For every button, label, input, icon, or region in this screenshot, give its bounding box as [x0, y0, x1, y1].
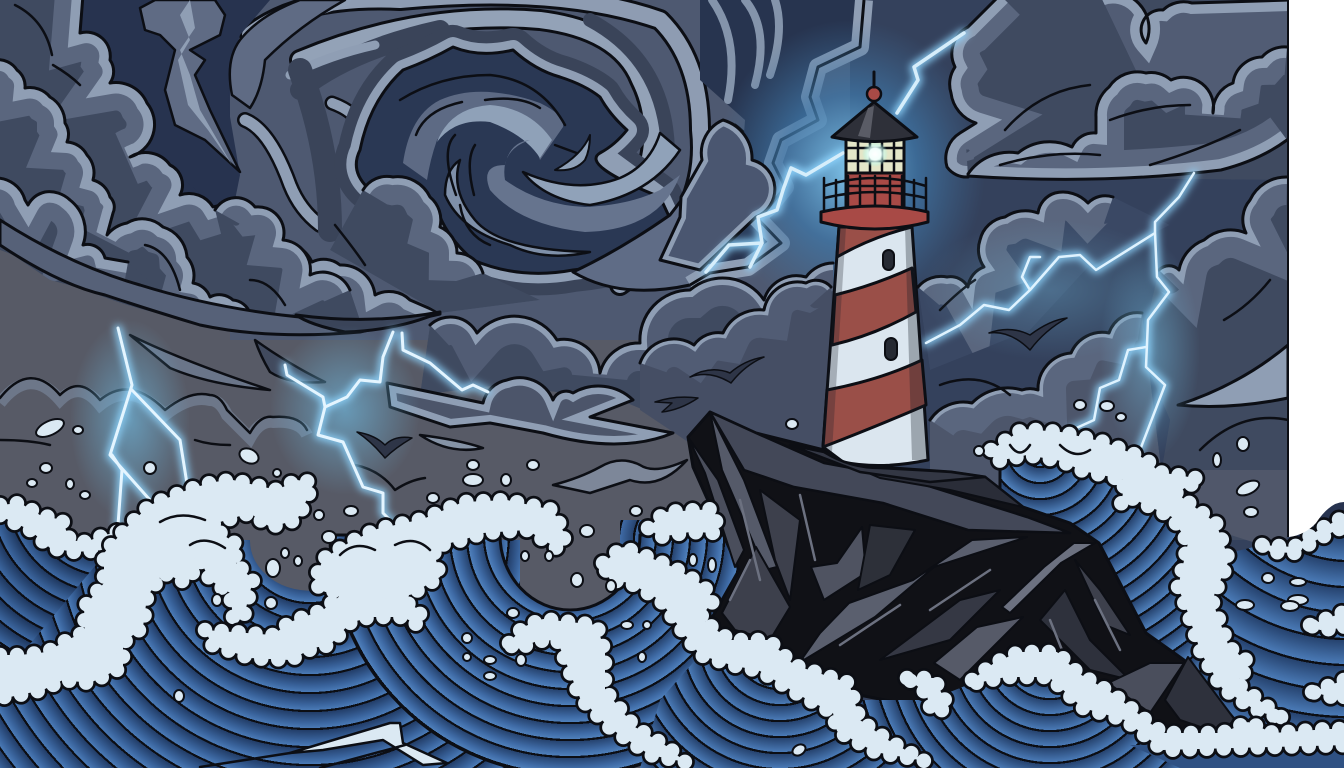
foam: right rim: [1262, 514, 1344, 553]
outline of front left: [0, 60, 320, 333]
rock silhouette: [688, 412, 1235, 737]
foam: small near rock: [907, 678, 949, 713]
tower: [823, 227, 928, 466]
panel: rock island: [688, 412, 1235, 737]
panel: foam crests: [0, 429, 1344, 762]
sky patch right of tall wave: [1150, 470, 1288, 545]
grey lower sky: [0, 240, 840, 768]
bolt: beside lighthouse: [706, 33, 964, 272]
rock ledge over tower foot: [790, 445, 985, 482]
bird: centre: [690, 357, 764, 383]
roof highlight: [858, 106, 874, 138]
finial spike: [872, 72, 876, 87]
strip edge line: [1287, 0, 1289, 537]
foam: left strip: [0, 503, 125, 552]
cloud: right edge streak: [1178, 345, 1288, 406]
cloud: centre band behind: [421, 264, 833, 408]
pocket rim line: [690, 0, 864, 285]
panel: navy pocket by lighthouse: [690, 0, 864, 285]
birds: [357, 318, 1067, 458]
cloud: right low: [930, 314, 1160, 486]
foam: right small one: [1310, 612, 1344, 630]
tower left shading: [823, 227, 846, 452]
sea: back of rock: [620, 520, 760, 700]
rock shard ten: [760, 490, 800, 600]
outline of far low left: [0, 378, 307, 433]
foam: middle wave: [205, 500, 565, 660]
cloud: centre stratus: [387, 378, 673, 444]
panel: swirl top ribbons: [245, 0, 701, 285]
sea strip line: [200, 745, 405, 768]
rock point right: [1165, 657, 1235, 733]
sea strip foam: [290, 723, 447, 765]
bolt: centre: [285, 332, 488, 522]
outline of right low: [930, 313, 1142, 420]
outline of right mid: [918, 192, 1113, 287]
cloud: low left: [0, 180, 128, 286]
sea: right side: [1200, 515, 1344, 768]
outline of centre lobe: [215, 198, 350, 290]
panel: lightning bolts: [70, 33, 1200, 525]
cloud: under long cloud: [130, 335, 270, 390]
swirl arm tail: [523, 133, 680, 205]
panel: navy pocket with cloud hook: [80, 0, 345, 207]
long lower cloud: [0, 220, 440, 335]
upper right detail lines: [1000, 85, 1240, 165]
stratus right: [553, 460, 687, 493]
foam: long centre: [603, 547, 925, 761]
foam: curling centre: [509, 619, 685, 762]
outline of centre stratus: [387, 378, 673, 444]
cloud: top right corner: [1102, 0, 1287, 98]
outline of mid under swirl: [363, 176, 483, 273]
bolt: right: [926, 173, 1194, 450]
pocket rim light: [690, 0, 864, 285]
red stripe middle: [832, 268, 916, 345]
cloud tendril: [230, 0, 345, 108]
outline of lobes left of tower: [640, 280, 831, 363]
right sky detail lines: [940, 280, 1288, 450]
foam: right small two: [1312, 680, 1344, 700]
small stratus pieces: [420, 435, 483, 450]
lower tail cloud under swirl: [573, 125, 755, 290]
foam: upper small: [648, 509, 718, 537]
sea: far left: [0, 515, 120, 720]
rock shard five: [811, 527, 866, 600]
bird: right: [989, 318, 1067, 350]
rock top slab right: [850, 465, 1023, 507]
sea: under centre foam: [640, 655, 930, 768]
rock shard eight: [880, 590, 1000, 660]
bird: centre left: [357, 432, 412, 458]
cloud: back top right: [946, 0, 1290, 180]
lighthouse: [821, 72, 928, 466]
lantern glass: [846, 136, 904, 173]
cloud: mid under swirl: [330, 176, 540, 313]
rock shard eleven: [858, 525, 915, 590]
bolt glows: [70, 220, 1200, 520]
lamp: [862, 141, 888, 167]
red stripe lower: [823, 360, 926, 447]
cloud: centre lobe: [215, 198, 360, 320]
outline of top right corner: [1100, 0, 1290, 43]
outline of back left: [80, 0, 440, 313]
outline of upper right front: [968, 47, 1287, 179]
swirl arm upper: [403, 92, 563, 180]
bird: tiny: [655, 397, 698, 412]
panel: low clouds: [0, 335, 687, 493]
outline of back top right: [946, 0, 1000, 177]
cloud: right mid: [919, 194, 1112, 353]
long pointed tail: [296, 312, 440, 332]
rock shard one: [710, 412, 777, 570]
rock shard nine: [1040, 590, 1130, 680]
swirl arm light: [437, 105, 552, 158]
outline of right tall: [1159, 177, 1287, 270]
tower shading: [905, 227, 928, 460]
rock shard seven: [1002, 543, 1095, 613]
cloud hook: [140, 0, 240, 172]
outline of low left: [0, 178, 128, 262]
foam: right tall: [991, 429, 1285, 720]
sea: small left pocket: [0, 540, 520, 768]
cloud: lobes left of tower: [640, 280, 831, 450]
outline of centre band: [430, 263, 833, 373]
gallery railing: [824, 176, 926, 210]
rock shard four: [799, 537, 1027, 663]
rock top slab: [710, 412, 1070, 533]
cloud: under long cloud 2: [255, 340, 325, 383]
cloud: back left: [0, 0, 440, 333]
panel: sea: [0, 455, 1344, 768]
cloud: upper right front: [968, 47, 1287, 179]
cloud interior lines: [15, 5, 365, 305]
sea: tall wave behind rock: [1000, 455, 1240, 760]
finial: [867, 87, 881, 101]
rock shard two: [688, 437, 744, 567]
bolt: left: [110, 328, 188, 525]
white margin strip: [1289, 0, 1344, 537]
panel: swirl ring base: [230, 0, 870, 340]
roof: [832, 102, 917, 142]
foam: big left wave: [0, 480, 312, 697]
foam: lower right: [972, 652, 1344, 750]
foam interior lines: [160, 445, 1090, 555]
swirl arm lower left: [445, 160, 590, 256]
wispy lines: [0, 440, 425, 490]
sea: near small foam: [840, 680, 1240, 768]
panel: right sky: [850, 0, 1290, 768]
sea: centre curl: [330, 535, 810, 768]
gallery deck: [821, 206, 928, 229]
outline of lobe: [660, 120, 775, 270]
red stripe top: [837, 227, 912, 257]
cloud: right tall: [1154, 178, 1287, 540]
rock shard six: [934, 617, 1023, 680]
panel: spray droplets: [27, 400, 1308, 758]
rock shard twelve: [1075, 560, 1130, 635]
panel: left clouds: [0, 0, 540, 335]
panel: swirl dark eye: [356, 47, 680, 273]
glow behind lighthouse: [715, 20, 985, 320]
red base room: [846, 172, 904, 208]
sea: right bottom: [1130, 745, 1344, 768]
streaks in navy pocket: [712, 0, 779, 100]
cloud: front left: [0, 61, 246, 308]
rock shard three: [722, 547, 790, 640]
rock small right: [1108, 663, 1184, 713]
cloud: left of lighthouse lobe: [660, 120, 775, 270]
cloud rim: far low left: [0, 383, 307, 438]
rock highlights: [730, 495, 1120, 670]
lantern bars: [846, 136, 904, 173]
swirl arm lower right: [487, 140, 680, 232]
window lower: [885, 338, 897, 360]
panel: lower sea: [200, 655, 1344, 768]
window upper: [883, 250, 894, 270]
